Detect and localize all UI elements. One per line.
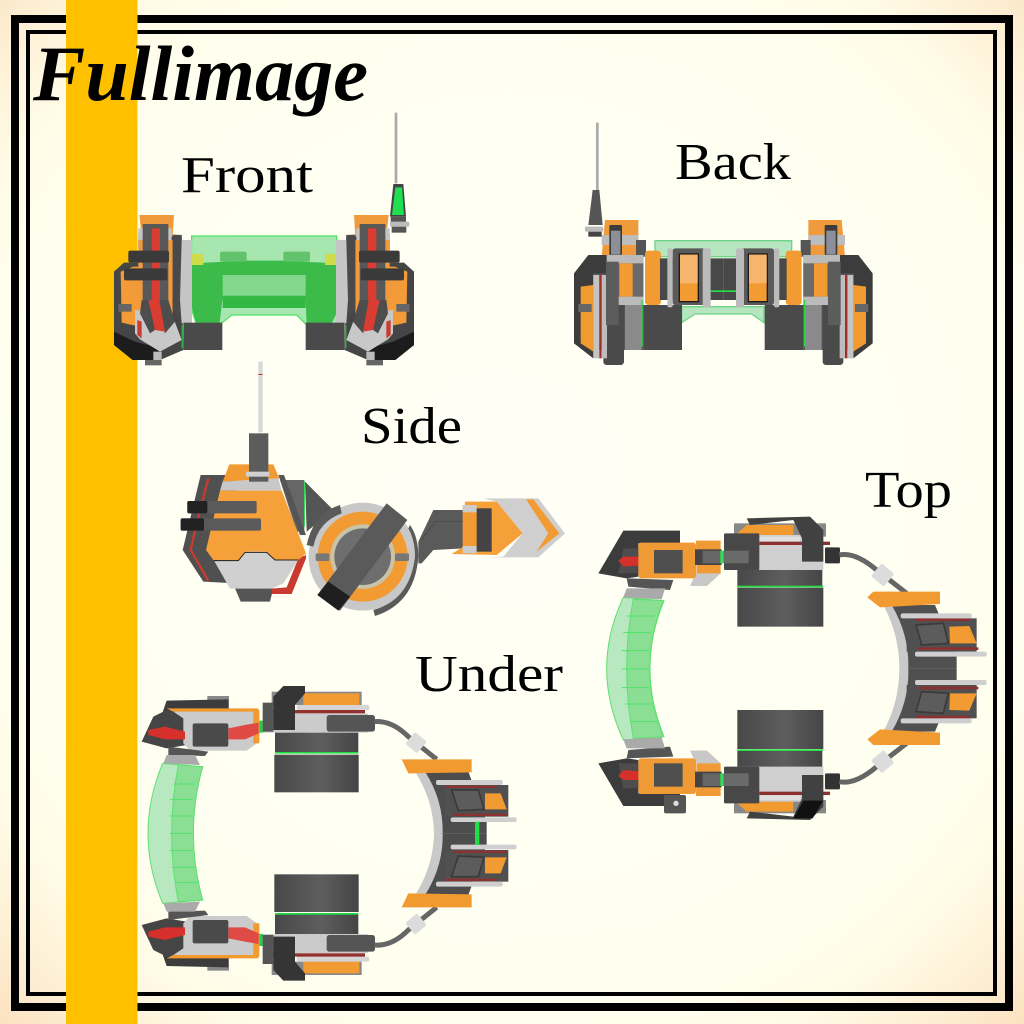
lower half <box>598 668 987 820</box>
rear connector <box>278 475 333 535</box>
right side <box>723 220 873 365</box>
device: side view <box>181 362 565 616</box>
left arm <box>114 215 222 365</box>
green band <box>607 597 664 740</box>
device: front view <box>114 113 414 365</box>
head <box>181 433 306 602</box>
label: Top: Top <box>865 462 952 519</box>
label: Side: Side <box>361 398 462 455</box>
centre light strip <box>711 290 736 292</box>
right arm <box>306 215 414 365</box>
title: Fullimage <box>32 30 368 117</box>
label: Front: Front <box>181 147 314 204</box>
black shadow patch <box>793 801 823 818</box>
forward arm <box>418 498 565 563</box>
lower half <box>142 833 517 981</box>
antenna <box>390 113 409 233</box>
upper half <box>142 686 517 833</box>
left side <box>574 220 723 365</box>
joint wheel <box>307 503 418 616</box>
green band <box>148 763 203 903</box>
antenna <box>258 362 263 432</box>
centre light strip <box>475 822 479 845</box>
device: under view <box>142 686 517 981</box>
yellow vertical band <box>66 0 138 1024</box>
label: Back: Back <box>675 134 791 191</box>
green centre piece <box>655 241 792 323</box>
small mount <box>664 795 686 813</box>
label: Under: Under <box>415 646 563 703</box>
upper half <box>598 517 987 668</box>
device: back view <box>574 123 873 365</box>
device: top view <box>598 517 987 820</box>
green centre piece <box>191 236 337 325</box>
antenna <box>585 123 603 237</box>
